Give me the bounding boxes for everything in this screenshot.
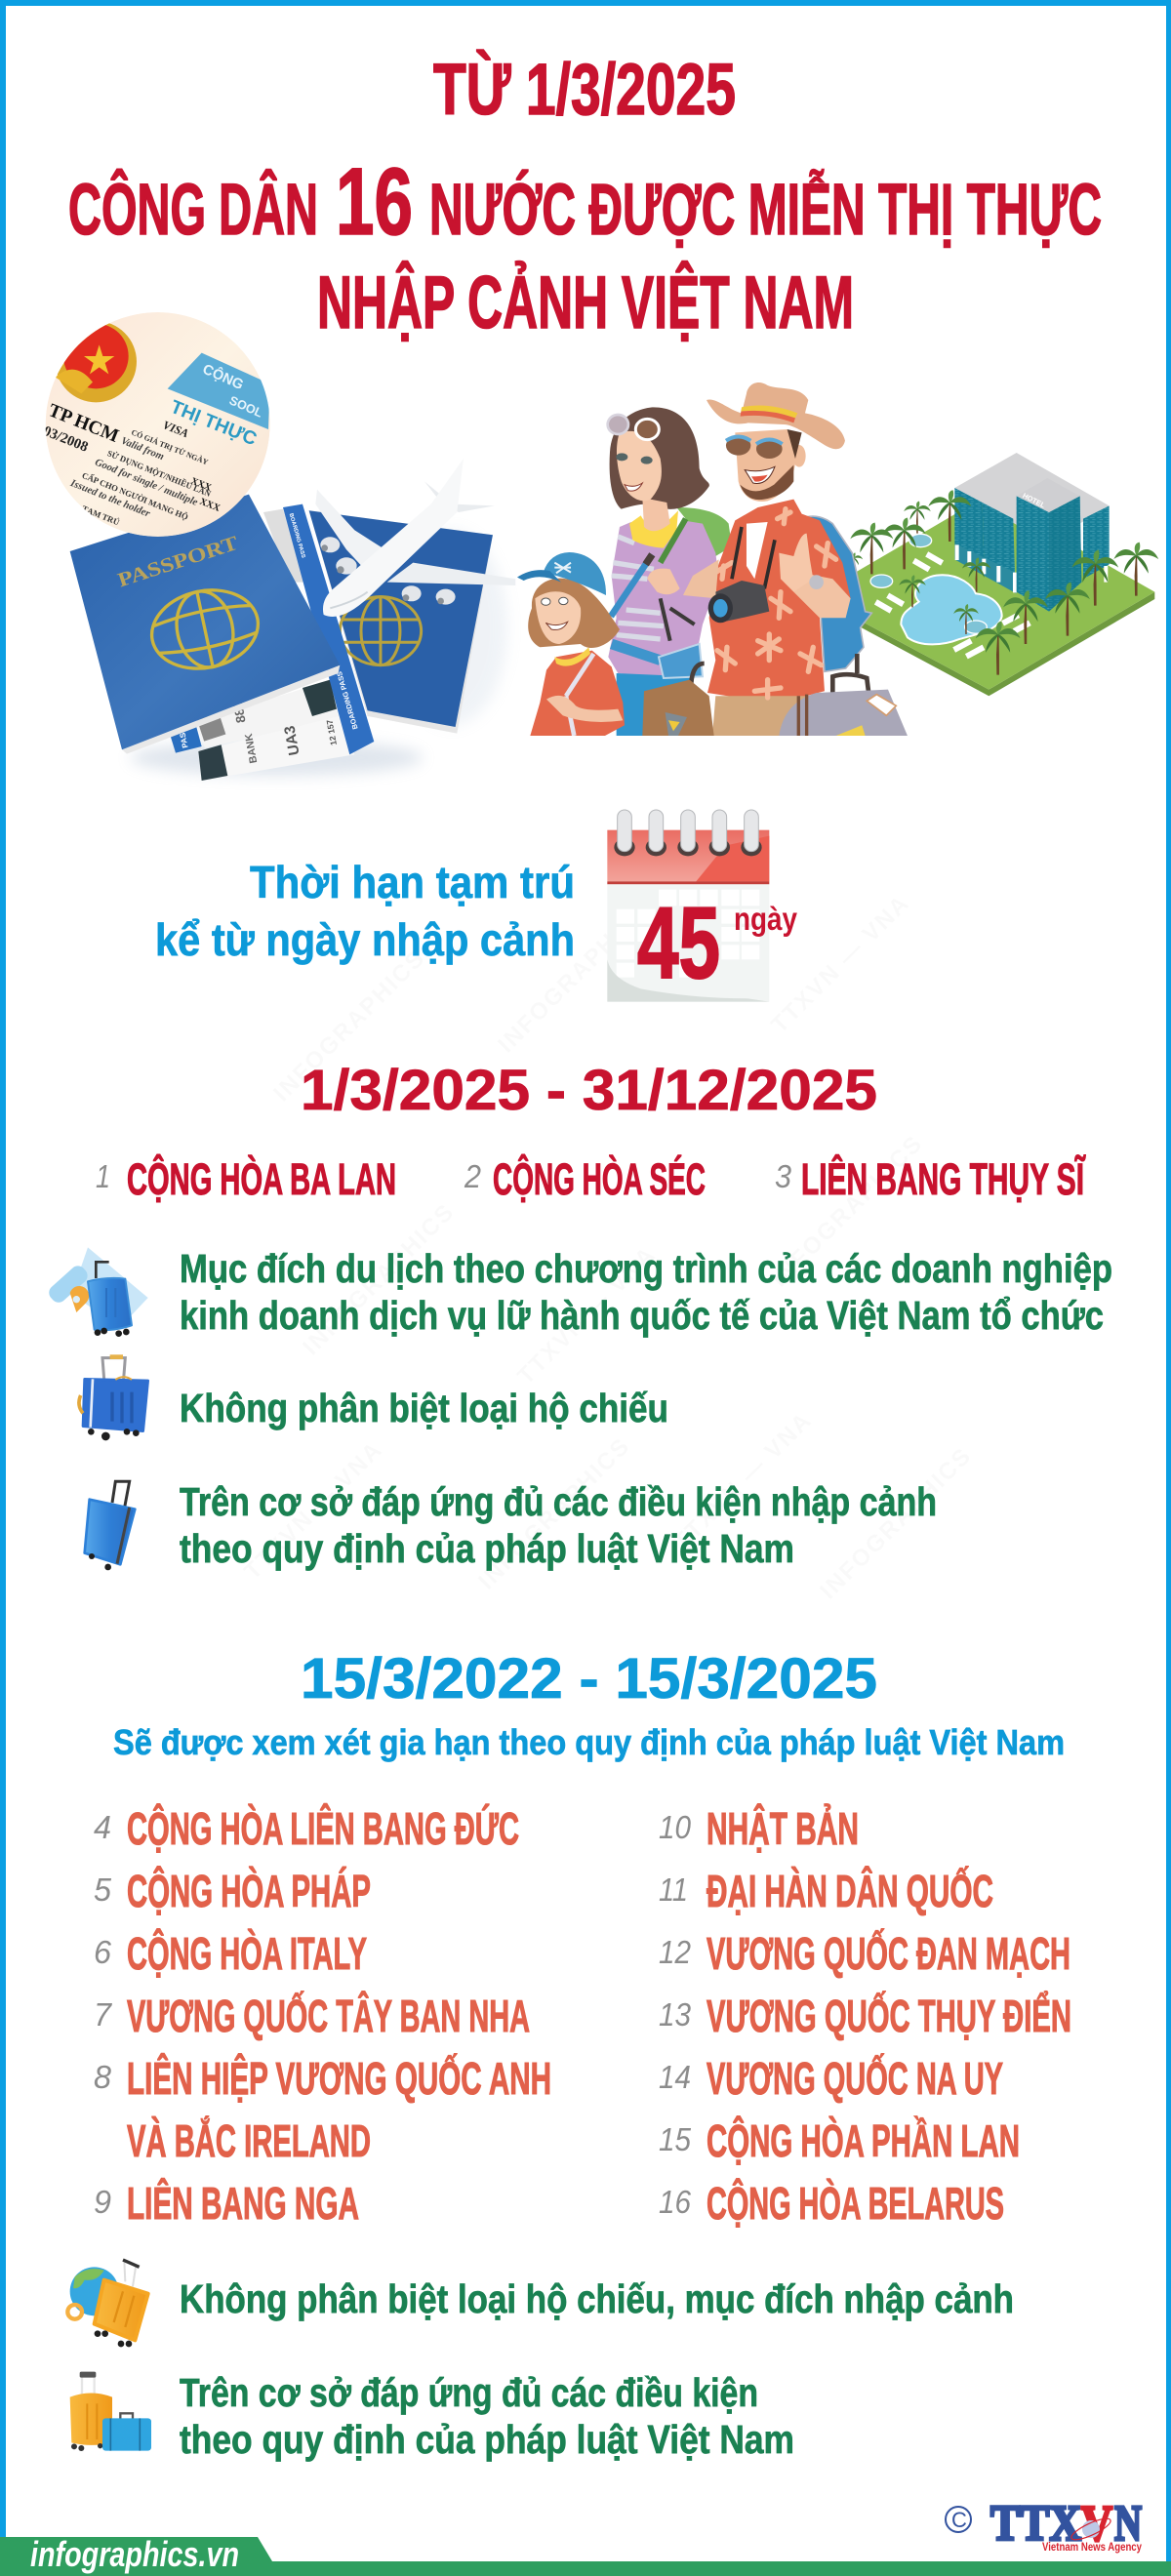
visa circle: SỬ DỤNG MỘT/NHIỀU LẦN: [106, 448, 213, 499]
country list: left column: LIÊN BANG NGA: [127, 2178, 359, 2229]
illustration: passports, boarding passes and airplane: [41, 312, 515, 781]
title: TỪ 1/3/2025: [433, 49, 736, 130]
country list: right column: ĐẠI HÀN DÂN QUỐC: [707, 1866, 993, 1916]
country list: left column: VÀ BẮC IRELAND: [127, 2115, 371, 2166]
visa circle: SOOL: [227, 393, 264, 421]
visa circle: CẤP CHO NGƯỜI MANG HỘ: [81, 470, 190, 522]
back passport: [309, 510, 493, 734]
visa circle: XXX: [189, 476, 214, 494]
text: purpose of travel: [180, 1246, 1112, 1338]
text: any passport or purpose: Không phân biệt loại hộ chiếu, mục đích nhập cảnh: [180, 2276, 1014, 2321]
logo: TTXVN: V: [1081, 2496, 1112, 2552]
icon: globe and orange suitcase: [67, 2260, 148, 2347]
visa circle: Valid from: [119, 436, 165, 463]
front passport: PASSPORT: [115, 533, 241, 591]
luggage: [642, 654, 908, 736]
boarding passes: BANK: [243, 732, 260, 764]
text: conditions under Vietnamese law: theo quy định của pháp luật Việt Nam: [180, 2417, 794, 2462]
icon: orange and blue luggage: [70, 2372, 151, 2451]
logo: TTXVN: Vietnam News Agency: [1042, 2542, 1143, 2554]
boarding passes: [169, 504, 374, 781]
boarding passes: UA3: [282, 724, 303, 757]
country list: left column: CỘNG HÒA LIÊN BANG ĐỨC: [127, 1803, 519, 1854]
country list: right column: 11: [659, 1872, 688, 1908]
country list: right column: 14: [659, 2059, 691, 2095]
country list: three countries: 2: [464, 1158, 481, 1194]
front passport: [70, 495, 340, 754]
country list: right column: 16: [659, 2184, 692, 2220]
stay duration text: [155, 857, 575, 965]
country list: left column: 8: [94, 2059, 112, 2095]
visa circle: TP HCM: [45, 400, 122, 447]
child: [517, 552, 625, 736]
logo: TTXVN: [946, 2496, 1143, 2554]
country list: right column: VƯƠNG QUỐC NA UY: [707, 2053, 1003, 2104]
heading: period 15/3/2022 - 15/3/2025: 15/3/2022 - 15/3/2025: [301, 1647, 877, 1711]
woman: [608, 407, 732, 736]
visa circle: TẠM TRÚ: [81, 503, 122, 528]
country list: three countries: [96, 1154, 1086, 1204]
illustration: tourist family: [517, 382, 908, 736]
country list: left column: 4: [94, 1809, 111, 1845]
text: any passport type: Không phân biệt loại hộ chiếu: [180, 1386, 668, 1430]
illustration: hotel resort: HOTEL: [1021, 491, 1047, 510]
country list: right column: 12: [659, 1934, 691, 1970]
icon: wide blue suitcase: [79, 1354, 148, 1440]
visa circle: CỘNG: [200, 360, 247, 393]
country list: left column: [94, 1803, 551, 2229]
country list: left column: LIÊN HIỆP VƯƠNG QUỐC ANH: [127, 2053, 551, 2104]
visa circle: CÓ GIÁ TRỊ TỪ NGÀY: [130, 427, 210, 466]
country list: left column: 7: [94, 1996, 113, 2033]
country list: right column: 10: [659, 1809, 692, 1845]
heading: period 1/3/2025 - 31/12/2025: 1/3/2025 - 31/12/2025: [301, 1059, 877, 1122]
airplane: [315, 459, 515, 617]
footer bar with site name: [0, 2534, 1171, 2576]
visa circle: Good for single / multiple: [94, 458, 199, 508]
text: conditions under Vietnamese law: Trên cơ sở đáp ứng đủ các điều kiện: [180, 2370, 758, 2415]
country list: three countries: CỘNG HÒA SÉC: [493, 1154, 706, 1204]
country list: left column: 5: [94, 1872, 112, 1908]
logo: TTXVN: TTX: [990, 2496, 1081, 2552]
illustration: hotel resort: [815, 453, 1158, 696]
country list: left column: VƯƠNG QUỐC TÂY BAN NHA: [127, 1991, 530, 2041]
title: NHẬP CẢNH VIỆT NAM: [317, 261, 854, 344]
icon: map and blue suitcase: [46, 1247, 148, 1337]
boarding passes: BOARDING PASS: [288, 513, 306, 559]
country list: right column: CỘNG HÒA BELARUS: [707, 2178, 1004, 2229]
visa circle: Issued to the holder: [68, 478, 152, 520]
stay duration text: Thời hạn tạm trú: [250, 857, 575, 907]
boarding passes: PASS: [177, 726, 190, 748]
stay duration text: kể từ ngày nhập cảnh: [155, 914, 575, 965]
icon: upright blue suitcase: [85, 1481, 135, 1570]
visa circle: VISA: [161, 418, 190, 440]
country list: right column: 15: [659, 2121, 692, 2157]
boarding passes: BOARDING PASS: [335, 670, 360, 731]
country list: right column: 13: [659, 1996, 692, 2033]
text: entry conditions: Trên cơ sở đáp ứng đủ các điều kiện nhập cảnh: [180, 1479, 937, 1524]
logo: TTXVN: C: [951, 2508, 967, 2532]
footer bar with site name: infographics.vn: [30, 2534, 239, 2574]
country list: left column: CỘNG HÒA PHÁP: [127, 1866, 371, 1916]
logo: TTXVN: N: [1114, 2496, 1142, 2552]
icon: calendar 45 days: ngày: [734, 901, 798, 937]
text: conditions under Vietnamese law: [180, 2370, 794, 2462]
man: [683, 382, 871, 736]
visa circle: 03/2008: [41, 423, 90, 456]
visa circle: XXX: [198, 497, 222, 514]
subheading: extension: Sẽ được xem xét gia hạn theo quy định của pháp luật Việt Nam: [113, 1722, 1065, 1762]
country list: left column: 9: [94, 2184, 111, 2220]
text: entry conditions: [180, 1479, 937, 1571]
text: entry conditions: theo quy định của pháp luật Việt Nam: [180, 1526, 794, 1571]
boarding passes: 12 157: [324, 719, 339, 746]
icon: calendar 45 days: 45: [637, 887, 720, 1000]
country list: left column: 6: [94, 1934, 112, 1970]
title: CÔNG DÂN: [68, 169, 318, 250]
title: 16: [336, 148, 413, 255]
country list: right column: NHẬT BẢN: [707, 1803, 859, 1854]
visa circle: THỊ THỰC: [167, 397, 260, 450]
country list: right column: [659, 1803, 1071, 2229]
title: [68, 49, 1102, 344]
country list: three countries: 3: [775, 1158, 792, 1194]
icon: calendar 45 days: [607, 810, 798, 1002]
boarding passes: 880: [230, 701, 249, 724]
country list: three countries: 1: [96, 1158, 110, 1194]
country list: left column: CỘNG HÒA ITALY: [127, 1928, 367, 1979]
visa circle: [41, 312, 270, 537]
country list: three countries: CỘNG HÒA BA LAN: [127, 1154, 396, 1204]
